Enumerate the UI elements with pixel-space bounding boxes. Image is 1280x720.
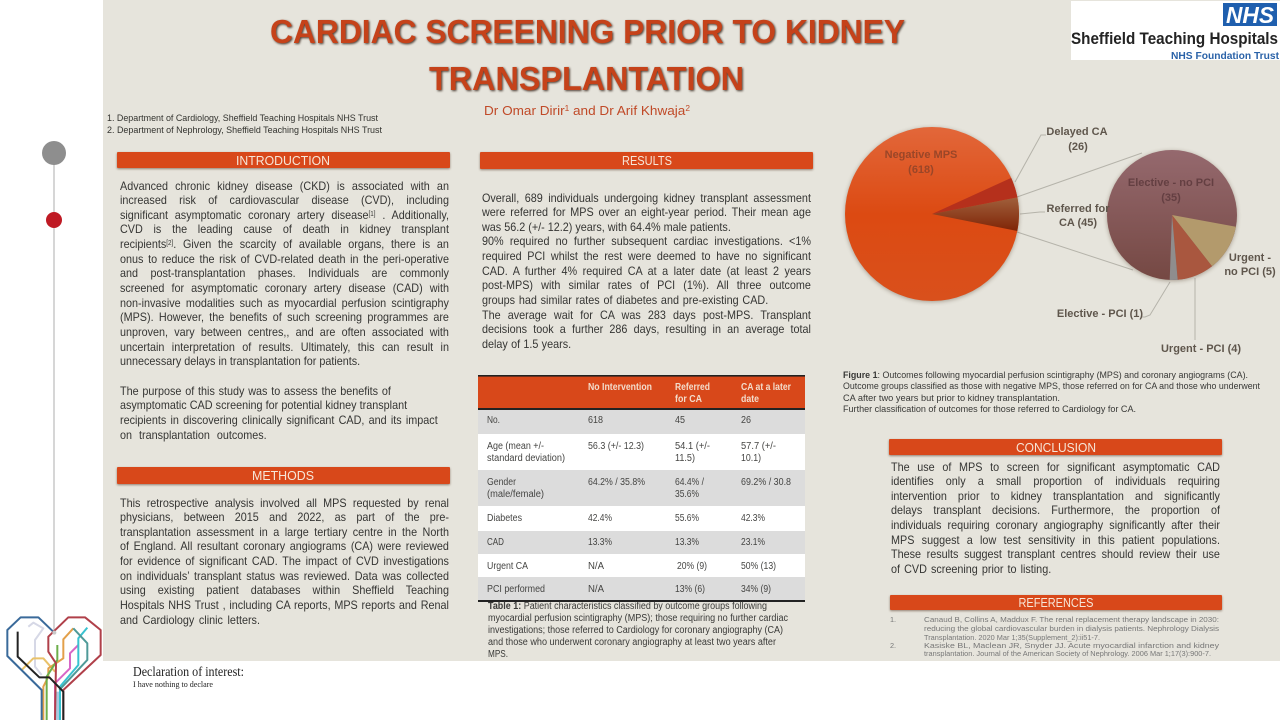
pie labels (885, 126, 1276, 355)
table caption: MPS. (488, 649, 508, 660)
text: results: required PCI whilst the rest were deemed to have no significant (482, 249, 811, 263)
table body: 20% (9) (677, 561, 707, 572)
text: results (482, 190, 811, 351)
text: introduction: onus to reduce the risk of CVD-related death in the peri-operative (120, 252, 449, 266)
main pie (845, 127, 1019, 301)
table body: (male/female) (487, 489, 544, 500)
text: references: 1. (890, 615, 896, 624)
table body: 13% (6) (675, 584, 705, 595)
table body: 13.3% (675, 537, 699, 548)
text: introduction: non-invasive modalities such as myocardial perfusion scintigraphy (120, 296, 449, 310)
text: introduction: recipients in discovering clinically significant CAD, and its impact (120, 413, 438, 427)
text: results: Overall, 689 individuals undergoing kidney transplant assessment (482, 190, 811, 204)
table body: 69.2% / 30.8 (741, 477, 791, 488)
table header: Referred (675, 382, 710, 393)
figure caption: Further classification of outcomes for those referred to Cardiology for CA. (843, 404, 1136, 415)
text: introduction: significant asymptomatic coronary artery disease[1] . Additionally, (120, 208, 449, 222)
text: introduction: screened for asymptomatic coronary artery disease (CAD) with (120, 281, 449, 295)
pie labels: CA (45) (1059, 217, 1097, 229)
table body: 10.1) (741, 453, 761, 464)
table body: 26 (741, 415, 751, 426)
table body: CAD (487, 537, 504, 548)
table: patient characteristics (478, 375, 805, 660)
pie labels: Urgent - (1229, 252, 1271, 264)
text: results: 90% required no further subsequent cardiac investigations. <1% (482, 234, 811, 248)
text: conclusion: intervention prior to kidney transplantation and significantly (891, 489, 1220, 503)
text: conclusion: delays transplant decisions. Furthermore, the proportion of (891, 503, 1220, 517)
authors: and Dr Arif Khwaja (569, 103, 686, 118)
leader lines (1015, 135, 1195, 340)
table body: N/A (588, 584, 604, 595)
table body: 11.5) (675, 453, 695, 464)
table caption: investigations; those referred to Cardiology for coronary angiography (CA) (488, 625, 783, 636)
table body: 64.4% / (675, 477, 704, 488)
title (270, 13, 905, 97)
table caption (488, 601, 788, 660)
table body: PCI performed (487, 584, 545, 595)
text: references: transplantation. Journal of the American Society of Nephrology. 2006 Mar 1;17(3):900-7. (924, 649, 1211, 658)
text: conclusion: of CVD screening prior to listing. (891, 562, 1051, 576)
text: references: Kasiske BL, Maclean JR, Snyder JJ. Acute myocardial infarction and kidney (924, 641, 1219, 650)
heading: introduction (117, 152, 450, 168)
authors: 1 (565, 104, 570, 113)
pie labels: Negative MPS (885, 149, 957, 161)
table body: 34% (9) (741, 584, 771, 595)
table body: 13.3% (588, 537, 612, 548)
text: results: The average wait for CA was 283 days post-MPS. Transplant (482, 308, 811, 322)
title: CARDIAC SCREENING PRIOR TO KIDNEY (270, 13, 905, 50)
heading: references (890, 595, 1222, 610)
text: introduction: unproven, vary between centres,, and are often associated with (120, 325, 449, 339)
table body: 618 (588, 415, 603, 426)
text: references: Canaud B, Collins A, Maddux F. The renal replacement therapy landscape in 2030: (924, 615, 1219, 624)
affiliations (107, 112, 382, 135)
breakout pie (1107, 150, 1237, 280)
heading: results (480, 152, 813, 169)
table body: Gender (487, 477, 517, 488)
text: references: Transplantation. 2020 Mar 1;35(Supplement_2):ii51-7. (924, 633, 1100, 642)
logo: Sheffield Teaching Hospitals NHS: NHS (1226, 2, 1275, 28)
text: conclusion: These results suggest transplant centres should review their use (891, 547, 1220, 561)
table body: Urgent CA (487, 561, 528, 572)
text: introduction: uncertain interpretation of results. Ultimately, this can result in (120, 340, 449, 354)
logo: Sheffield Teaching Hospitals NHS (1071, 1, 1280, 62)
text: results: decisions took a further 286 days, resulting in an average total (482, 322, 811, 336)
table body: 54.1 (+/- (675, 441, 710, 452)
table caption: myocardial perfusion scintigraphy (MPS); those requiring no further cardiac (488, 613, 788, 624)
heading: methods: METHODS (252, 468, 314, 483)
authors: 2 (685, 104, 691, 113)
text: methods: using existing patient databases within Sheffield Teaching (120, 583, 449, 597)
text: methods: for evidence of significant CAD. The impact of CVD investigations (120, 554, 449, 568)
text: methods: of England. All resultant coronary angiograms (CA) were reviewed (120, 539, 449, 553)
heading: results: RESULTS (622, 153, 672, 168)
pie labels: (618) (908, 164, 934, 176)
table body: 56.3 (+/- 12.3) (588, 441, 644, 452)
pie labels: Elective - PCI (1) (1057, 308, 1143, 320)
text: introduction: and post-transplantation phases. Individuals are commonly (120, 266, 449, 280)
pie labels: no PCI (5) (1224, 266, 1276, 278)
table body: 42.4% (588, 513, 612, 524)
pie labels: Urgent - PCI (4) (1161, 343, 1241, 355)
text: references (890, 615, 1219, 658)
text: conclusion: MPS suggest a low test sensitivity in this patient populations. (891, 533, 1220, 547)
heading: references: REFERENCES (1018, 595, 1094, 610)
text: introduction: (MPS). However, the benefits of such screening programmes are (120, 310, 449, 324)
table body: 23.1% (741, 537, 765, 548)
text: introduction: recipients[2]. Given the scarcity of available organs, there is an (120, 237, 449, 251)
text: introduction: asymptomatic CAD screening for potential kidney transplant (120, 398, 407, 412)
text: introduction: increased risk of cardiovascular disease (CVD), including (120, 193, 449, 207)
timeline decoration (42, 141, 66, 632)
text: introduction: Advanced chronic kidney disease (CKD) is associated with an (120, 178, 449, 192)
text: results: delay of 1.5 years. (482, 337, 571, 351)
table body: Age (mean +/- (487, 441, 544, 452)
affiliations: 2. Department of Nephrology, Sheffield Teaching Hospitals NHS Trust (107, 124, 382, 135)
text: methods: on individuals’ transplant status was reviewed. Data was collected (120, 569, 449, 583)
text: introduction: The purpose of this study was to assess the benefits of (120, 384, 391, 398)
table header: No Intervention (588, 382, 652, 393)
table header (588, 382, 791, 405)
pie labels: Referred for (1047, 203, 1110, 215)
figure caption: CA after two years but prior to kidney transplantation. (843, 393, 1060, 404)
text: introduction: unnecessary delays in transplantation for patients. (120, 354, 360, 368)
pie labels: (26) (1068, 141, 1088, 153)
table body: Diabetes (487, 513, 522, 524)
text: introduction: on transplantation outcomes. (120, 428, 267, 442)
table body: 64.2% / 35.8% (588, 477, 645, 488)
text: conclusion: identifies only a small proportion of individuals requiring (891, 474, 1220, 488)
text: conclusion: individuals requiring coronary angiography significantly after their (891, 518, 1220, 532)
text: methods: Hospitals NHS Trust , including CA reports, MPS reports and Renal (120, 598, 449, 612)
pie labels: (35) (1161, 192, 1181, 204)
heading: conclusion (889, 439, 1222, 455)
table body: 50% (13) (741, 561, 776, 572)
pie labels: Delayed CA (1046, 126, 1108, 138)
text: methods: transplantation assessment in a large tertiary centre in the North (120, 525, 449, 539)
table body: 55.6% (675, 513, 699, 524)
affiliations: 1. Department of Cardiology, Sheffield Teaching Hospitals NHS Trust (107, 112, 378, 123)
text: references: 2. (890, 641, 896, 650)
table header: for CA (675, 394, 702, 405)
text: results: groups had similar rates of diabetes and pre-existing CAD. (482, 293, 768, 307)
table body: 42.3% (741, 513, 765, 524)
figure caption (843, 370, 1260, 415)
text: methods: and Cardiology clinic letters. (120, 613, 260, 627)
table body: 57.7 (+/- (741, 441, 776, 452)
authors: Dr Omar Dirir (484, 103, 561, 118)
declaration of interest (133, 665, 244, 689)
text: introduction (120, 178, 449, 442)
table caption: Table 1: Patient characteristics classified by outcome groups following (488, 601, 767, 612)
heading: conclusion: CONCLUSION (1016, 440, 1096, 455)
figure caption: Figure 1: Outcomes following myocardial perfusion scintigraphy (MPS) and coronary angiograms (CA). (843, 370, 1248, 381)
declaration of interest: I have nothing to declare (133, 679, 213, 689)
table body: standard deviation) (487, 453, 565, 464)
table body: 45 (675, 415, 685, 426)
text: conclusion (891, 460, 1220, 576)
table body (487, 415, 791, 595)
title: TRANSPLANTATION (429, 60, 744, 97)
table header: date (741, 394, 759, 405)
panel: references (890, 595, 1222, 658)
text: results: was 56.2 (+/- 12.2) years, with 64.4% male patients. (482, 220, 731, 234)
text: results: CAD. A further 4% required CA at a later date (at least 2 years (482, 264, 811, 278)
text: methods: This retrospective analysis involved all MPS requested by renal (120, 496, 449, 510)
table header: CA at a later (741, 382, 791, 393)
icon: metro-line heart logo (7, 617, 101, 720)
declaration of interest: Declaration of interest: (133, 665, 244, 680)
text: methods: physicians, between 2015 and 2022, as part of the pre- (120, 510, 449, 524)
heading: introduction: INTRODUCTION (236, 153, 330, 168)
text: introduction: CVD is the leading cause of death in kidney transplant (120, 222, 449, 236)
pie labels: Elective - no PCI (1128, 177, 1214, 189)
logo: Sheffield Teaching Hospitals NHS: NHS Foundation Trust (1171, 50, 1279, 62)
text: conclusion: The use of MPS to screen for significant asymptomatic CAD (891, 460, 1220, 474)
table caption: and those who underwent coronary angiography at least two years after (488, 637, 777, 648)
table body: No. (487, 415, 500, 426)
text: methods (120, 496, 449, 627)
chart: pie of outcomes with breakout pie (845, 126, 1276, 355)
text: results: were referred for MPS over an eight-year period. Their mean age (482, 205, 811, 219)
table body: 35.6% (675, 489, 699, 500)
text: results: post-MPS) with similar rates of PCI (1%). All three outcome (482, 278, 811, 292)
heading: methods (117, 467, 450, 484)
table body: N/A (588, 561, 604, 572)
table rows (478, 375, 805, 602)
text: references: reducing the global cardiovascular burden in dialysis patients. Nephrology Dialysis (924, 624, 1219, 633)
